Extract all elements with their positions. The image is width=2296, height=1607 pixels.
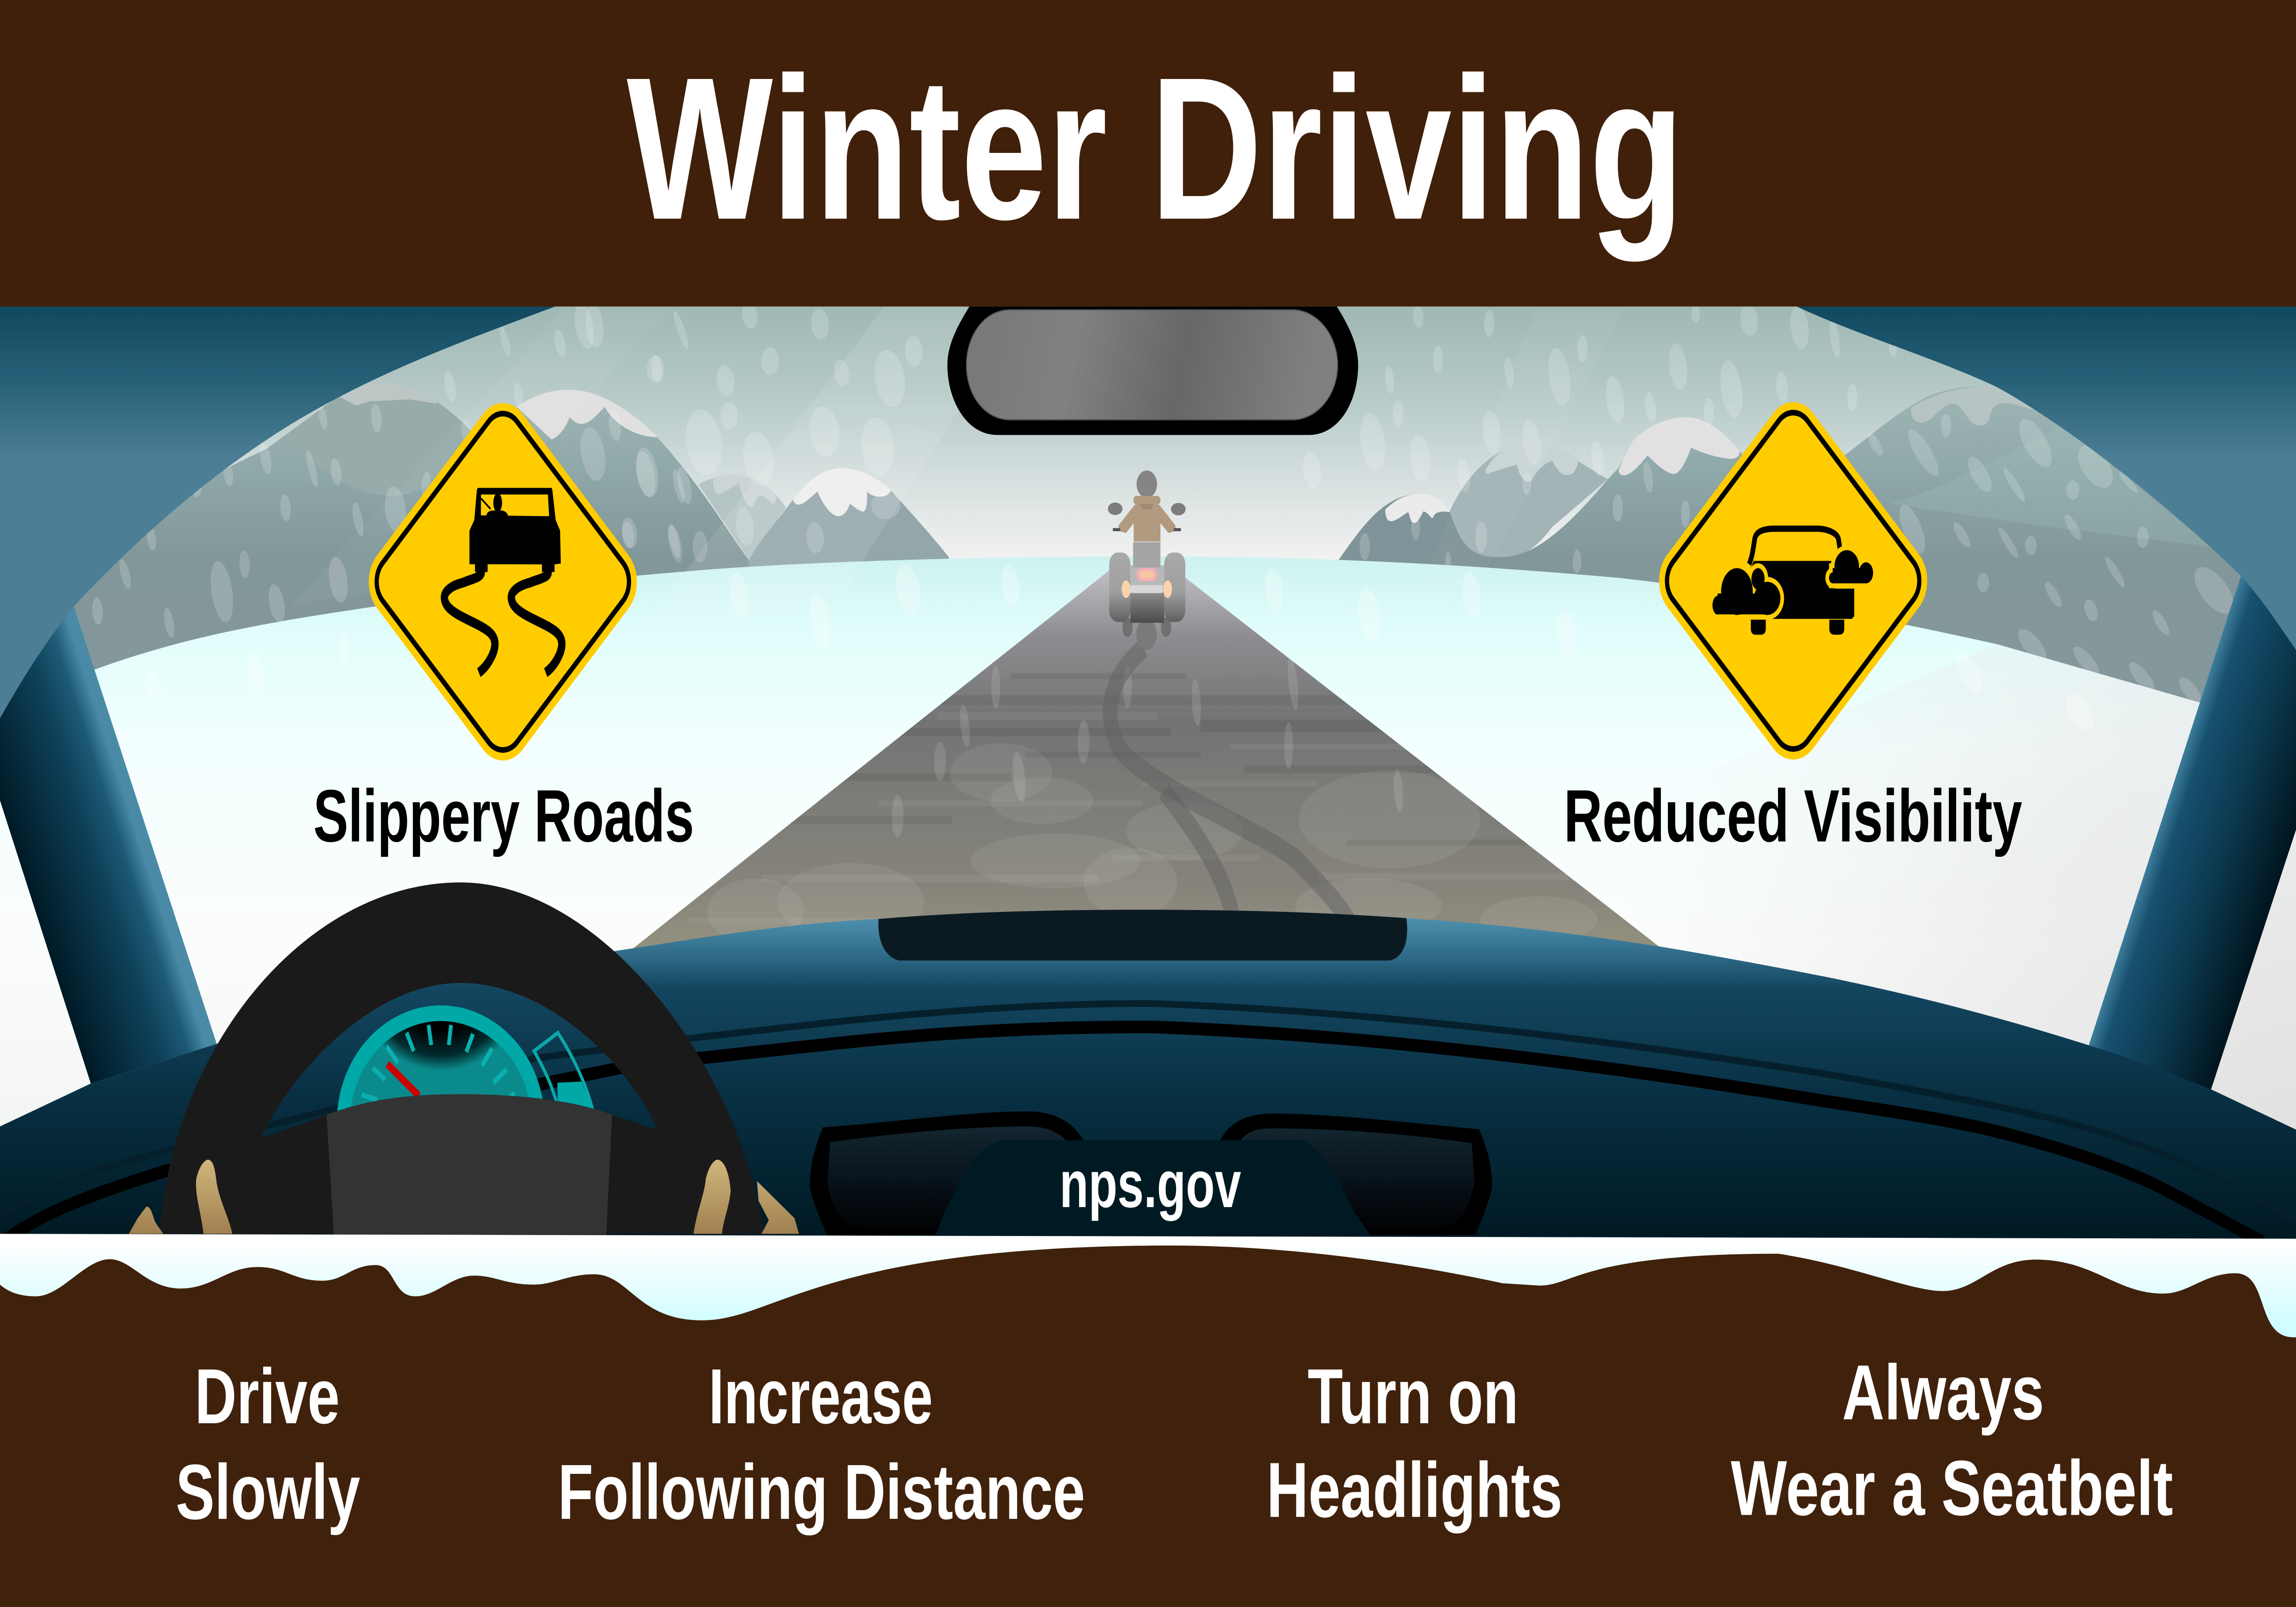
road spray clouds — [707, 743, 1598, 945]
scene: winter view through windshield — [0, 307, 2296, 1129]
rearview mirror — [947, 307, 1358, 435]
snow drift strip — [0, 1234, 2296, 1347]
fuel gauge — [534, 1033, 592, 1109]
label: reduced visibility: Reduced Visibility — [1564, 775, 2022, 858]
tip: always wear a seatbelt — [1731, 1349, 2173, 1532]
faint raindrops over snow — [145, 562, 2099, 739]
driver's hands — [129, 1160, 799, 1234]
dashboard trim lines — [0, 1004, 2296, 1244]
tip: always wear a seatbelt: Always — [1842, 1349, 2044, 1436]
bottom brown banner — [0, 1246, 2296, 1607]
url text: nps.gov — [1059, 1147, 1241, 1222]
tip: increase following distance: Following Distance — [558, 1448, 1085, 1535]
motorcycle and rider in fog — [1108, 471, 1186, 650]
tip: always wear a seatbelt: Wear a Seatbelt — [1731, 1444, 2173, 1532]
mountains: right range — [1339, 386, 2296, 781]
air vent left — [810, 1112, 1089, 1235]
warning sign: reduced visibility — [1648, 387, 1939, 775]
mountains: left range — [0, 382, 949, 703]
title banner — [0, 0, 2296, 307]
speedometer tick marks — [362, 1025, 515, 1100]
tip: turn on headlights: Turn on — [1308, 1353, 1519, 1440]
right windshield pillar — [2089, 576, 2296, 1090]
steering wheel hub — [326, 1094, 612, 1235]
snowy ground — [0, 556, 2296, 1249]
left windshield pillar — [0, 607, 217, 1084]
tip: drive slowly: Slowly — [176, 1448, 360, 1535]
tip: turn on headlights: Headlights — [1266, 1446, 1562, 1534]
tip: increase following distance: Increase — [709, 1353, 933, 1440]
warning sign: slippery roads — [357, 388, 648, 776]
steering wheel — [160, 882, 764, 1235]
windshield frame top — [0, 293, 2296, 719]
icon: skidding car — [445, 488, 562, 673]
skid tracks on road — [1110, 648, 1362, 956]
road texture streaks and drops — [688, 655, 1581, 923]
icon: car in fog clouds — [1712, 528, 1873, 635]
tip: drive slowly: Drive — [195, 1353, 340, 1440]
dashboard — [0, 910, 2296, 1249]
tip: drive slowly — [176, 1353, 360, 1535]
windshield light glare bands — [290, 307, 1626, 625]
title: Winter Driving — [627, 35, 1684, 263]
air vent right — [1216, 1113, 1492, 1235]
speedometer — [337, 1006, 545, 1240]
speedometer needle — [387, 1064, 419, 1096]
wiper housing — [878, 910, 1407, 961]
raindrops on windshield over sky — [91, 299, 2240, 708]
center console with nps.gov — [936, 1140, 1371, 1235]
snowy road — [633, 569, 1662, 956]
tip: increase following distance — [558, 1353, 1085, 1535]
tip: turn on headlights — [1266, 1353, 1562, 1534]
label: slippery roads: Slippery Roads — [313, 775, 694, 858]
